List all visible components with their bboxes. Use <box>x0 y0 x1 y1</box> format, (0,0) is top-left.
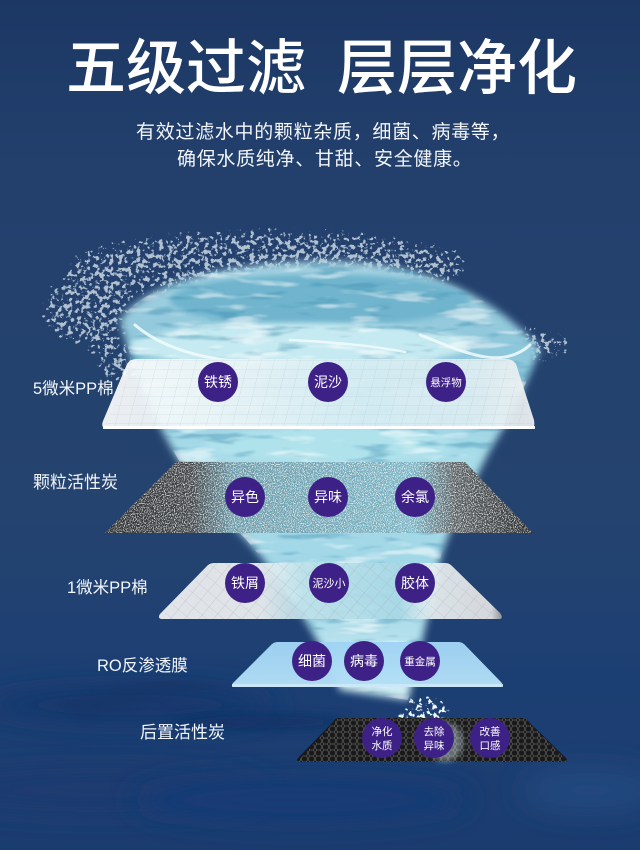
title: 层层净化 <box>337 35 577 102</box>
stage labels: 颗粒活性炭 <box>33 473 118 492</box>
bubble labels: 胶体 <box>401 575 429 591</box>
bubble labels: 病毒 <box>350 653 378 669</box>
bubble labels: 铁锈 <box>204 374 232 390</box>
bubble labels: 重金属 <box>404 655 436 668</box>
water tornado <box>42 228 568 718</box>
bubbles: filter 2 <box>225 477 435 517</box>
stage labels: 1微米PP棉 <box>67 578 148 597</box>
filter 3: 1 micron PP cotton <box>159 563 502 619</box>
bubbles: filter 4 <box>292 641 440 681</box>
bubbles: filter 5 <box>362 718 510 758</box>
water ripples <box>0 680 640 822</box>
bubble labels: 口感 <box>480 739 501 752</box>
bubble labels: 异味 <box>424 740 445 752</box>
bubble labels: 异色 <box>231 489 259 505</box>
stage labels: 5微米PP棉 <box>33 379 114 398</box>
bubbles: filter 1 <box>198 362 466 402</box>
subtitle: 有效过滤水中的颗粒杂质，细菌、病毒等， <box>136 121 510 143</box>
stage labels: 后置活性炭 <box>140 723 225 742</box>
bubble labels: 水质 <box>372 740 392 752</box>
funnel body <box>120 261 540 700</box>
bubble labels: 细菌 <box>298 653 326 669</box>
filter 4: RO membrane <box>232 642 503 687</box>
subtitle <box>136 121 510 170</box>
subtitle: 确保水质纯净、甘甜、安全健康。 <box>177 148 473 170</box>
bubble labels: 泥沙 <box>314 374 342 390</box>
filter 1: 5 micron PP cotton <box>102 359 535 429</box>
bubbles: filter 3 <box>225 563 435 603</box>
white streaks <box>135 325 530 362</box>
swirl shading <box>122 262 540 700</box>
bubble labels: 净化 <box>372 725 393 738</box>
title <box>66 35 577 102</box>
title: 五级过滤 <box>66 35 306 102</box>
filter 2: granular activated carbon <box>105 462 533 533</box>
bubble labels: 泥沙小 <box>312 577 346 590</box>
bubble labels: 余氯 <box>401 489 429 505</box>
splash droplets <box>35 223 578 389</box>
bubble labels: 去除 <box>424 725 445 738</box>
bubble labels: 铁屑 <box>231 575 259 591</box>
stage labels: RO反渗透膜 <box>97 656 188 675</box>
lower splash <box>319 687 461 763</box>
bubble labels <box>204 374 501 752</box>
bubble labels: 改善 <box>480 725 500 738</box>
bubble labels: 悬浮物 <box>430 376 462 389</box>
bubble labels: 异味 <box>314 489 342 505</box>
filter 5: post activated carbon <box>297 718 568 762</box>
stage labels <box>33 379 225 742</box>
